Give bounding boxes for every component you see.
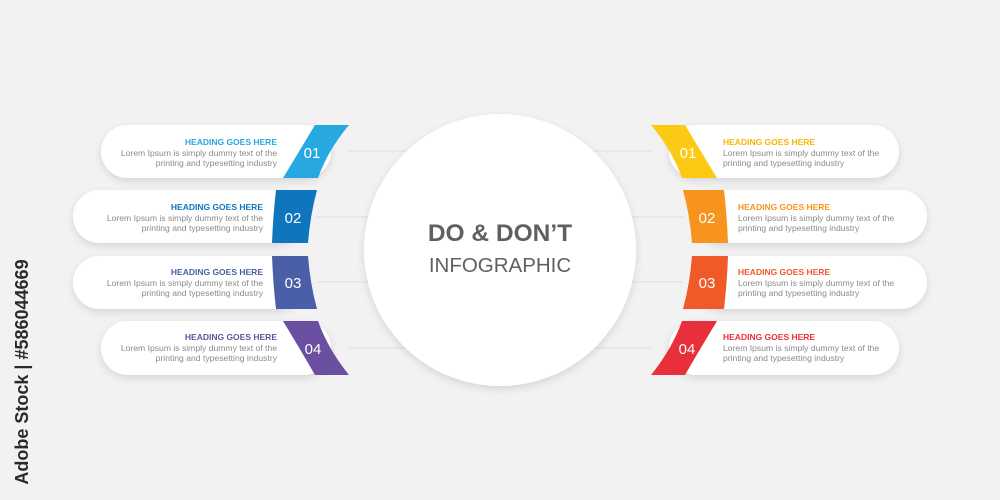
left item 1: HEADING GOES HERE bbox=[185, 137, 277, 147]
left item 2: printing and typesetting industry bbox=[142, 223, 264, 233]
subtitle: INFOGRAPHIC bbox=[429, 254, 571, 277]
right item 2: Lorem Ipsum is simply dummy text of the bbox=[738, 213, 894, 223]
left item 2: Lorem Ipsum is simply dummy text of the bbox=[107, 213, 263, 223]
left item 2: 02 bbox=[285, 210, 301, 227]
left item 3: 03 bbox=[285, 275, 301, 292]
left item 4: printing and typesetting industry bbox=[156, 353, 278, 363]
left item 1: Lorem Ipsum is simply dummy text of the bbox=[121, 148, 277, 158]
right item 1 bbox=[651, 125, 899, 178]
left item 3 bbox=[73, 256, 317, 309]
right item 2: 02 bbox=[699, 210, 715, 227]
left item 1 bbox=[101, 125, 349, 178]
right item 1: 01 bbox=[680, 145, 696, 162]
left item 3: Lorem Ipsum is simply dummy text of the bbox=[107, 278, 263, 288]
right item 3 bbox=[683, 256, 927, 309]
right item 3: 03 bbox=[699, 275, 715, 292]
right item 2: HEADING GOES HERE bbox=[738, 202, 830, 212]
watermark side label: Adobe Stock | #586044669 bbox=[12, 259, 32, 485]
connector lines bbox=[317, 151, 683, 348]
right item 3: Lorem Ipsum is simply dummy text of the bbox=[738, 278, 894, 288]
right item 3: HEADING GOES HERE bbox=[738, 267, 830, 277]
right item 4: Lorem Ipsum is simply dummy text of the bbox=[723, 343, 879, 353]
left item 1: 01 bbox=[304, 145, 320, 162]
right item 3: printing and typesetting industry bbox=[738, 288, 860, 298]
left item 1: printing and typesetting industry bbox=[156, 158, 278, 168]
center circle bbox=[364, 114, 636, 386]
right item 2 bbox=[683, 190, 927, 243]
title: DO & DON’T bbox=[428, 220, 572, 247]
left item 2 bbox=[73, 190, 317, 243]
right item 4: HEADING GOES HERE bbox=[723, 332, 815, 342]
right item 4 bbox=[651, 321, 899, 375]
left item 3: HEADING GOES HERE bbox=[171, 267, 263, 277]
left item 2: HEADING GOES HERE bbox=[171, 202, 263, 212]
left item 3: printing and typesetting industry bbox=[142, 288, 264, 298]
right item 1: printing and typesetting industry bbox=[723, 158, 845, 168]
right item 1: Lorem Ipsum is simply dummy text of the bbox=[723, 148, 879, 158]
right item 1: HEADING GOES HERE bbox=[723, 137, 815, 147]
left item 4: 04 bbox=[305, 341, 321, 358]
right item 2: printing and typesetting industry bbox=[738, 223, 860, 233]
left item 4: HEADING GOES HERE bbox=[185, 332, 277, 342]
right item 4: printing and typesetting industry bbox=[723, 353, 845, 363]
left item 4 bbox=[101, 321, 349, 375]
right item 4: 04 bbox=[679, 341, 695, 358]
left item 4: Lorem Ipsum is simply dummy text of the bbox=[121, 343, 277, 353]
